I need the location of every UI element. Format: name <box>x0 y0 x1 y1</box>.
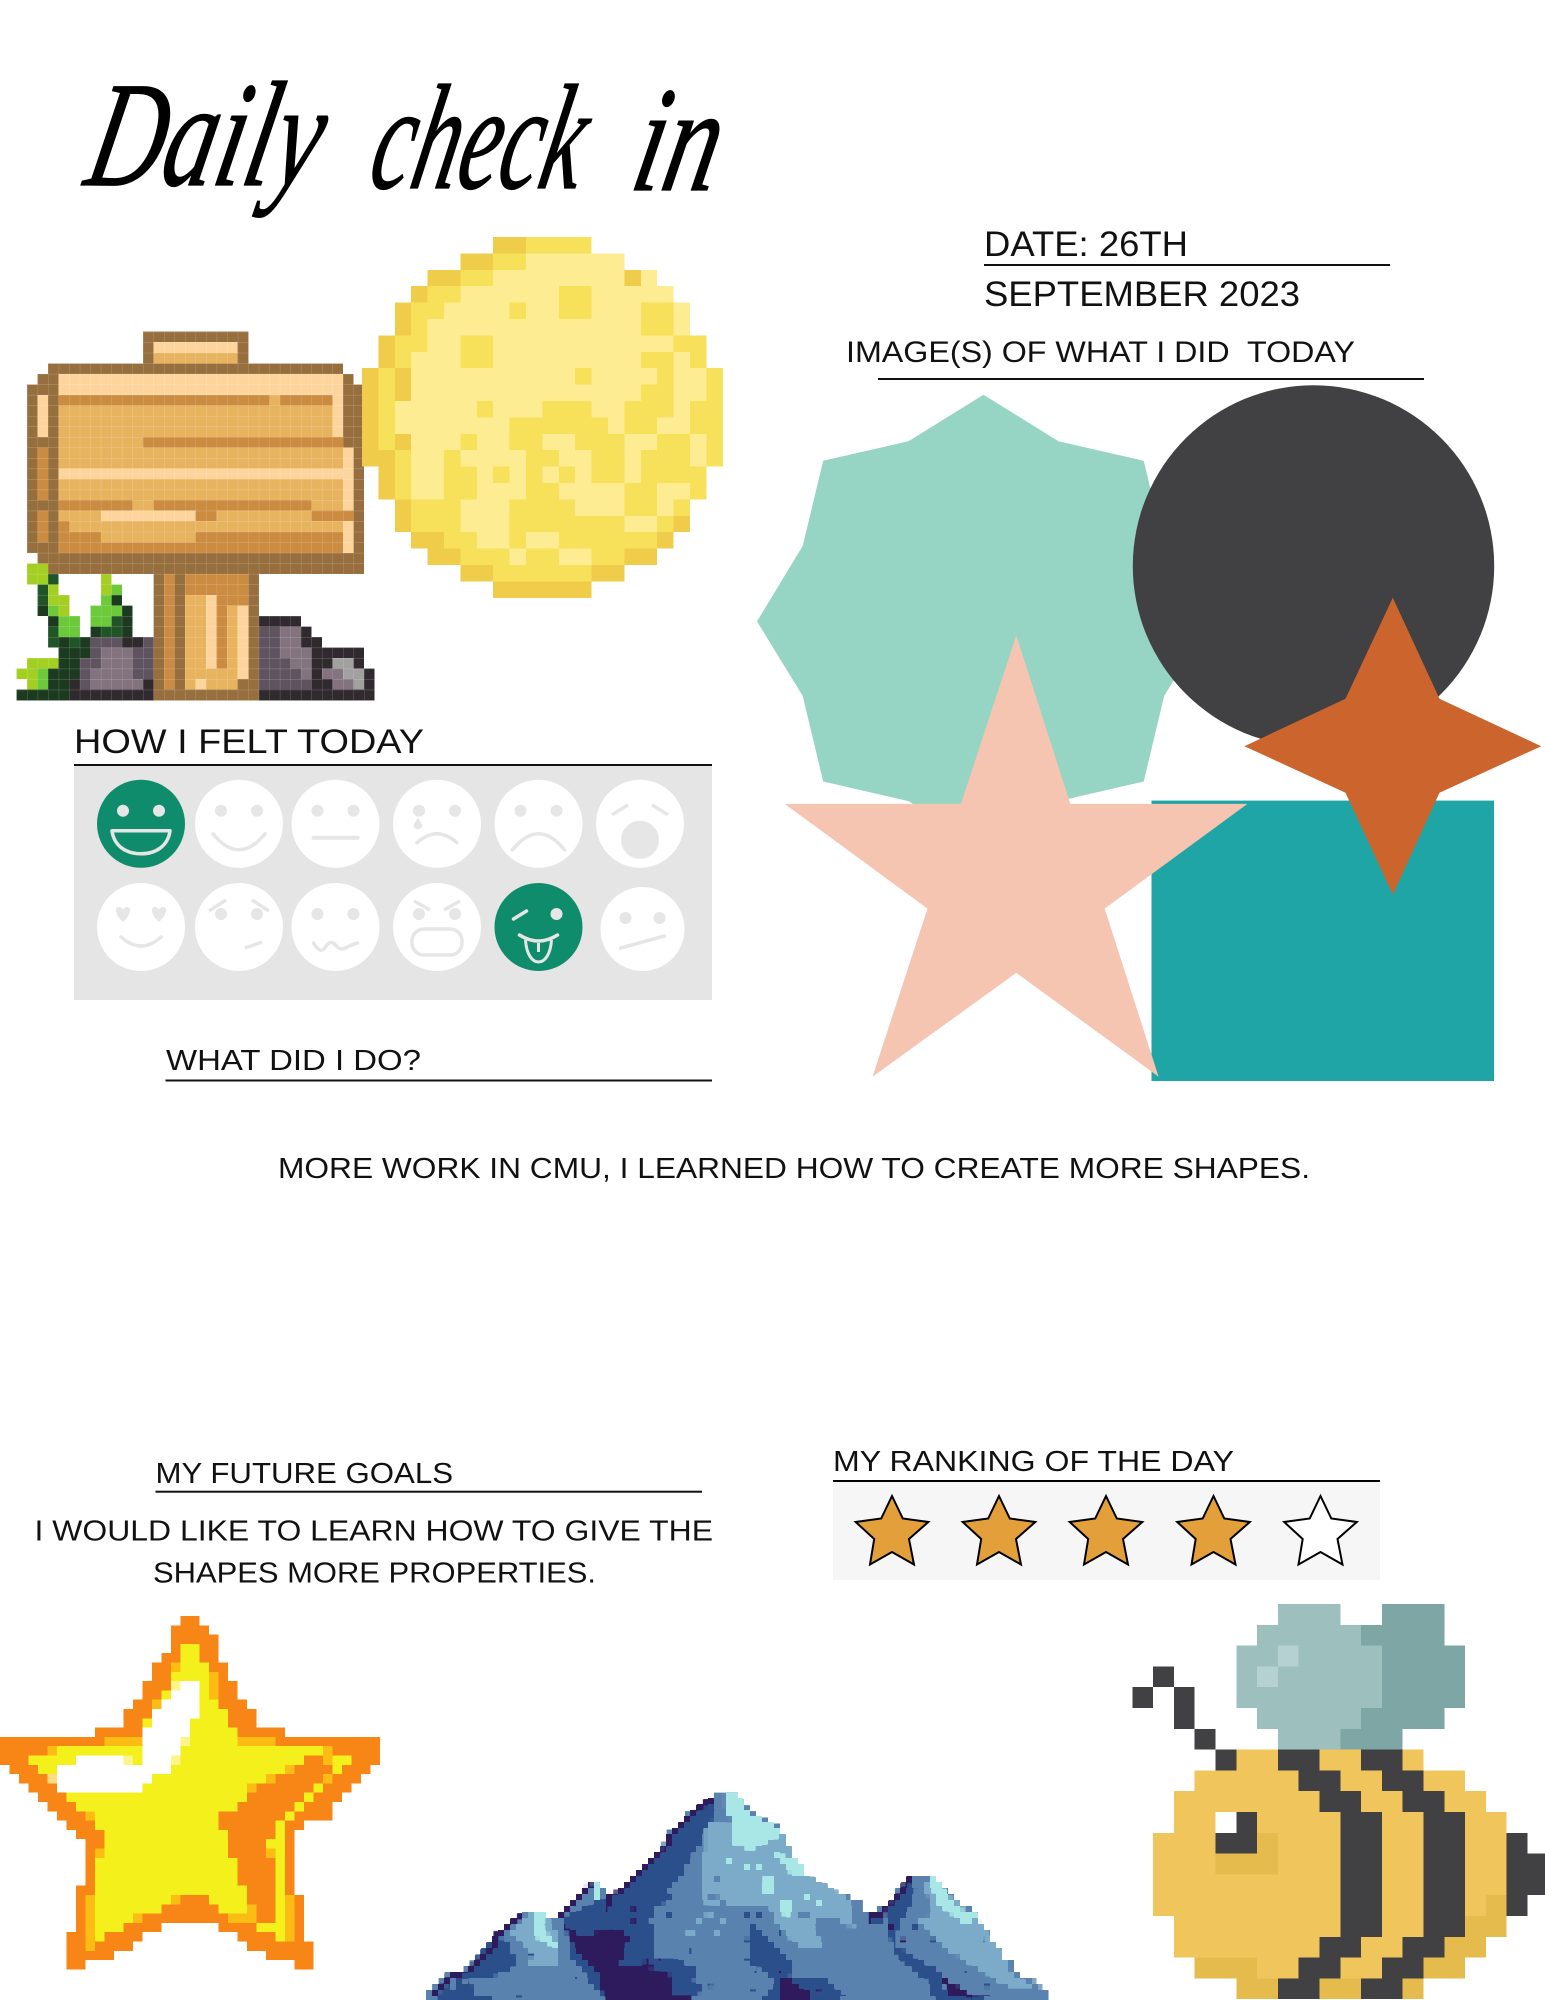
icon: filled star 1 <box>856 1496 928 1564</box>
icon: pixel star <box>0 1621 380 1965</box>
icon: laughing face selected <box>97 780 185 868</box>
heading: how I felt today: HOW I FELT TODAY <box>74 723 424 761</box>
shape: teal square <box>1152 801 1494 1081</box>
heading: my ranking of the day: MY RANKING OF THE DAY <box>833 1446 1234 1478</box>
shape: peach star <box>785 635 1247 1077</box>
icon: skeptical face <box>195 883 283 971</box>
icon: pixel mountains <box>428 1795 1046 2000</box>
icon: neutral face <box>292 780 380 868</box>
heading: what did I do: WHAT DID I DO? <box>166 1045 421 1077</box>
text block: activity description: MORE WORK IN CMU, I LEARNED HOW TO CREATE MORE SHAPES. <box>278 1153 1310 1185</box>
icon: filled star 3 <box>1070 1496 1142 1564</box>
title <box>74 51 740 223</box>
icon: pixel wooden sign <box>17 332 375 700</box>
icon: winking tongue face selected <box>494 883 582 971</box>
icon: pixel moon <box>362 245 723 590</box>
icon: filled star 4 <box>1177 1496 1250 1564</box>
heading: my future goals: MY FUTURE GOALS <box>156 1458 453 1490</box>
icon: angry face <box>393 883 481 971</box>
heading: images of what I did today: IMAGE(S) OF WHAT I DID TODAY <box>846 336 1355 369</box>
texture specks <box>489 1877 987 1986</box>
image: overlapping shapes <box>757 385 1541 1081</box>
icon: pixel bee <box>1132 1614 1545 1989</box>
shape: orange four-point star <box>1244 598 1541 895</box>
icon: shocked face <box>596 780 684 868</box>
icon: smiling face <box>195 780 283 868</box>
mountain silhouette <box>428 1795 1046 2000</box>
icon: sad face <box>494 780 582 868</box>
panel: mood faces <box>74 766 712 1000</box>
icy highlights <box>534 1795 977 1947</box>
heading: date: SEPTEMBER 2023 <box>984 275 1300 314</box>
title: Daily <box>74 51 343 218</box>
dark slopes <box>434 1801 991 2000</box>
panel: star rating <box>833 1482 1380 1580</box>
shape: dark circle <box>1133 385 1494 747</box>
icon: crying face <box>393 780 481 868</box>
light slopes <box>508 1823 1034 1987</box>
icon: wavy mouth face <box>292 883 380 971</box>
icon: smirking face <box>600 887 684 971</box>
heading: date: DATE: 26TH <box>984 225 1188 264</box>
shape: mint polygon <box>757 395 1210 848</box>
icon: heart eyes face <box>97 883 185 971</box>
text block: future goals: I WOULD LIKE TO LEARN HOW TO GIVE THE <box>34 1516 713 1548</box>
icon: empty star 5 <box>1284 1496 1357 1564</box>
icon: filled star 2 <box>963 1496 1035 1564</box>
text block: future goals: SHAPES MORE PROPERTIES. <box>153 1558 596 1590</box>
text block: future goals <box>34 1516 713 1590</box>
title: check <box>359 54 606 221</box>
title: in <box>621 56 740 223</box>
heading: date <box>984 225 1390 314</box>
navy shadows <box>563 1913 991 2000</box>
